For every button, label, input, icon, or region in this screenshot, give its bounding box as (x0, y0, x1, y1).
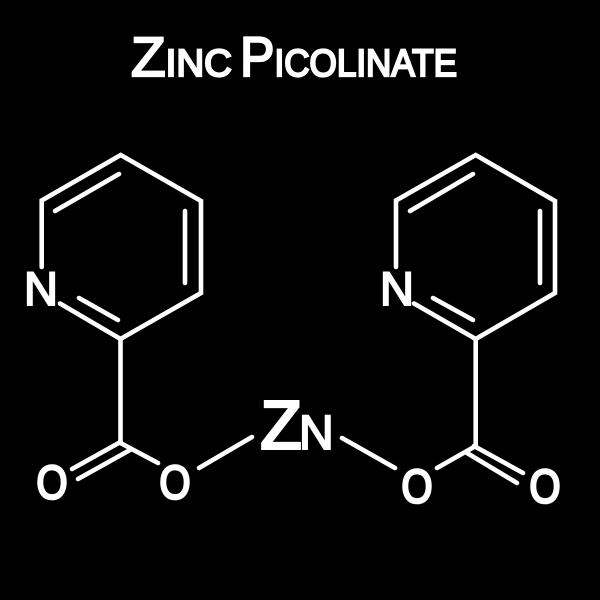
bond: zinc to right oxygen (342, 438, 395, 468)
title: PICOLINATE (240, 25, 457, 88)
left carboxylate group (36, 339, 190, 508)
zinc centre atom label: N (299, 407, 334, 460)
right ester oxygen label: O (402, 460, 432, 512)
right carboxylate group (402, 339, 560, 512)
right ring nitrogen label: N (380, 262, 414, 315)
right carbonyl oxygen label: O (530, 460, 560, 512)
title: ZINC (131, 25, 232, 88)
zinc centre atom label: Z (259, 386, 303, 466)
bond: left oxygen to zinc (199, 437, 252, 468)
left pyridine ring (24, 155, 201, 339)
right pyridine ring (380, 155, 555, 339)
left ester oxygen label: O (160, 456, 190, 508)
left carbonyl oxygen label: O (36, 456, 68, 508)
title (131, 25, 457, 88)
zinc centre atom label (259, 386, 334, 466)
left ring nitrogen label: N (24, 262, 58, 315)
